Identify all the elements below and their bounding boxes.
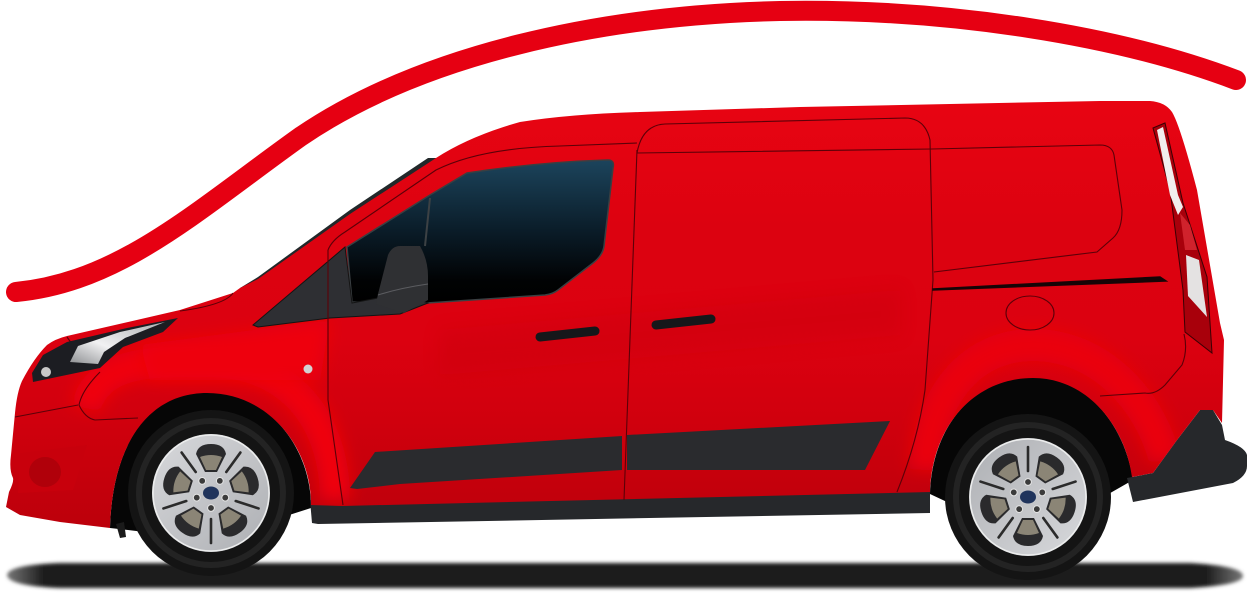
mirror and triangle trim [253,198,430,327]
black side strip [933,277,1166,290]
panel lines [15,118,1186,505]
sill [310,488,930,524]
body shading [85,290,1165,500]
fog lamp recess [18,445,87,493]
red swoosh roofline curve [16,11,1236,292]
headlight [32,318,178,382]
front wheel [128,410,294,576]
van body [6,101,1224,528]
rear wheel [945,414,1111,580]
tail light [1153,123,1212,353]
windscreen strip [240,158,438,288]
rear bumper [1127,410,1247,502]
window glass [347,160,613,303]
wheel arch shadows [110,377,1133,540]
indicator repeater [304,364,312,374]
ground shadow [7,563,1243,588]
door handles [540,331,595,337]
rubbing strips [350,436,622,489]
mud flap [116,522,126,538]
